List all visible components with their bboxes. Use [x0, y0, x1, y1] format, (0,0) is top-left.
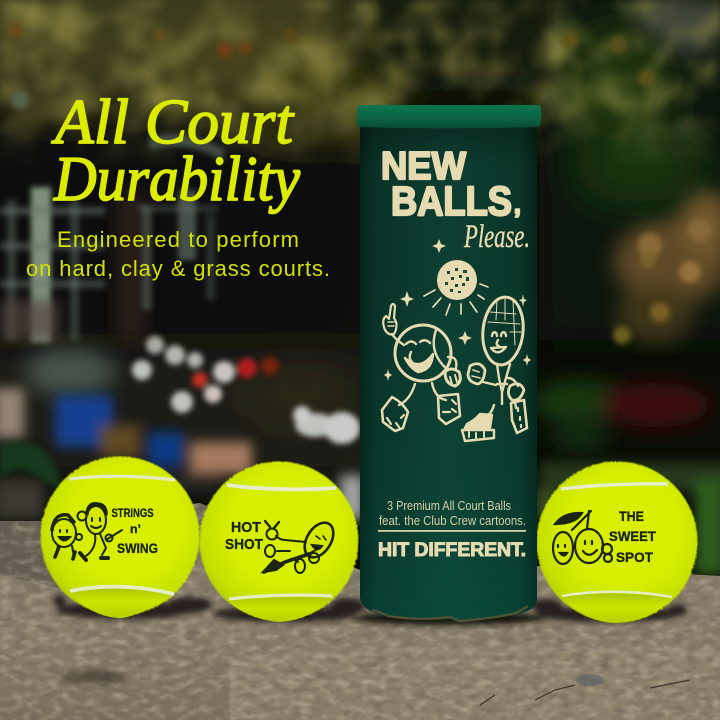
ball 2 label: HOT [231, 519, 261, 536]
background: blurred garden [0, 0, 720, 576]
can crimped base [372, 606, 528, 621]
can artwork: sparkles [384, 239, 531, 381]
heading: All Court Durability: All Court [51, 86, 295, 157]
ball 1 cartoon [52, 504, 122, 560]
ball 1 label [112, 506, 158, 556]
subheading: Engineered to perform [57, 227, 299, 252]
ball 2 label [225, 519, 263, 553]
product can [353, 105, 545, 625]
tennis ball: Hot Shot [200, 462, 358, 622]
ball 3 label [609, 508, 656, 565]
can script: Please.: Please. [463, 219, 530, 255]
subheading: on hard, clay & grass courts. [26, 256, 330, 281]
ball 2 felt [200, 462, 358, 620]
ball 1 seams [69, 476, 175, 618]
ball 1 label: n’ [130, 524, 141, 536]
ball 1 felt [40, 456, 200, 616]
can artwork: disco ball with rays [424, 260, 488, 315]
can tagline: 3 Premium All Court Balls [387, 499, 511, 513]
stone ledge [0, 500, 720, 720]
ball 3 seams [561, 484, 672, 623]
can body [360, 126, 537, 622]
subheading [26, 227, 330, 281]
ball 2 label: SHOT [225, 536, 263, 553]
ball 3 label: THE [619, 508, 644, 524]
ball 1 label: SWING [117, 540, 158, 556]
ball 1 label: STRINGS [112, 506, 154, 520]
tennis ball: Strings n' Swing [40, 456, 200, 618]
ball 2 seams [227, 485, 336, 622]
can tagline: feat. the Club Crew cartoons. [379, 514, 526, 528]
can slogan: HIT DIFFERENT.: HIT DIFFERENT. [378, 539, 526, 561]
bokeh highlights [8, 23, 712, 344]
ball 3 felt [536, 462, 698, 622]
ball shadows [54, 595, 687, 622]
can headline [381, 145, 521, 224]
can shadow [353, 611, 545, 625]
ball 3 label: SWEET [609, 528, 656, 544]
heading: All Court Durability: Durability [53, 143, 301, 214]
can artwork: tennis ball character [382, 304, 460, 431]
ball 2 cartoon [263, 518, 339, 573]
heading: All Court Durability [51, 86, 301, 214]
can artwork: racket character [462, 295, 527, 441]
can lid [357, 105, 541, 128]
tennis ball: The Sweet Spot [536, 462, 698, 623]
can tagline [379, 499, 526, 528]
ball 3 cartoon [553, 511, 612, 564]
can headline: , [514, 192, 521, 219]
can headline: NEW [381, 145, 466, 188]
ball 3 label: SPOT [616, 549, 653, 565]
can headline: BALLS [391, 178, 512, 224]
